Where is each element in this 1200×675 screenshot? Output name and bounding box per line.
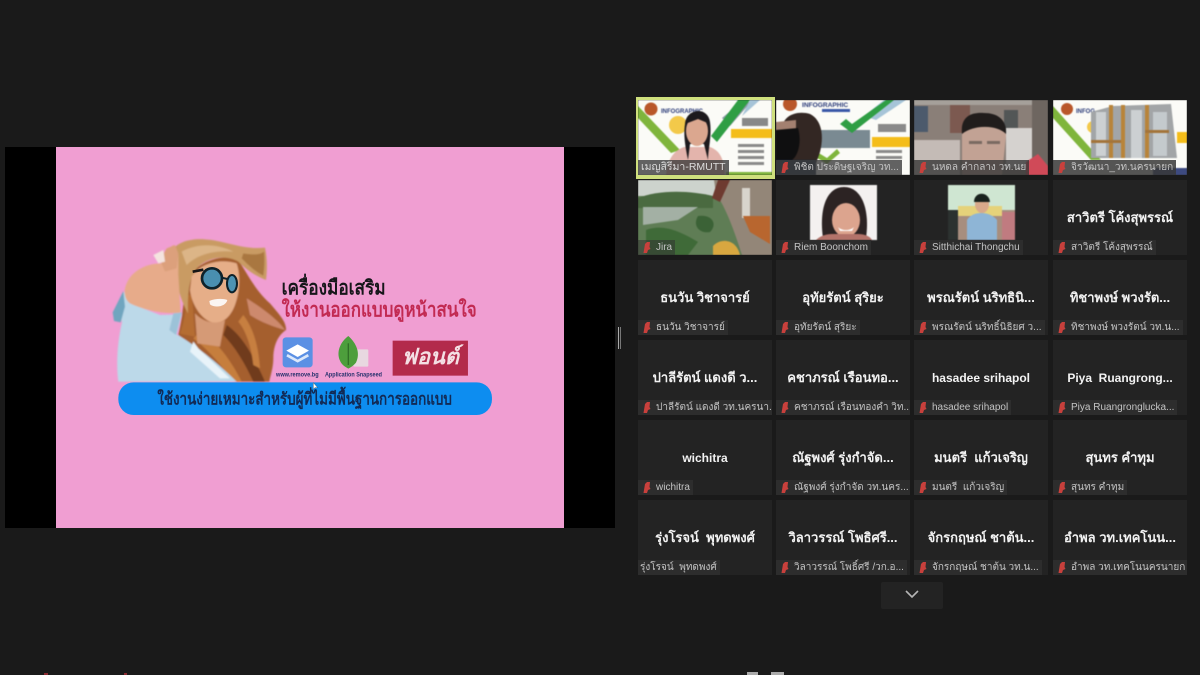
icon: remove.bg layers: www.remove.bg — [275, 372, 319, 378]
name label — [1053, 160, 1176, 175]
heading: tools: เครื่องมือเสริม — [282, 272, 386, 299]
tile: อุทัยรัตน์ สุริยะ: อุทัยรัตน์ สุริยะ — [794, 322, 857, 333]
neck — [195, 313, 225, 347]
tile: วิลาวรรณ์ โพธิศรี... — [776, 500, 910, 575]
tile: จักรกฤษณ์ ชาต้น...: จักรกฤษณ์ ชาต้น... — [928, 530, 1034, 545]
tile: Jira — [638, 180, 772, 255]
tile: wichitra: wichitra — [656, 482, 690, 493]
tile: poster with gowns: INFOG — [1076, 109, 1095, 115]
tile: ทิชาพงษ์ พวงรัต... — [1053, 260, 1187, 335]
icon: Snapseed leaf — [325, 336, 382, 378]
smile — [209, 299, 227, 306]
tile: อุทัยรัตน์ สุริยะ — [776, 260, 910, 335]
tile: อำพล วท.เทคโนน...: อำพล วท.เทคโนนครนายก — [1071, 562, 1185, 573]
tile: ปาลีรัตน์ แดงดี ว...: ปาลีรัตน์ แดงดี ว... — [653, 370, 757, 385]
tile: พรณรัตน์ นริทธินิ...: พรณรัตน์ นริทธินิ... — [927, 290, 1035, 305]
tile: สุนทร คำทุม — [1053, 420, 1187, 495]
tile: hasadee srihapol: hasadee srihapol — [932, 402, 1008, 413]
tile: participant with poster: INFOGRAPHIC — [802, 102, 848, 109]
tile: hasadee srihapol — [914, 340, 1048, 415]
tile: participant with poster — [776, 100, 910, 175]
hat — [173, 239, 267, 313]
tile: รุ่งโรจน์ พุทดพงศ์: รุ่งโรจน์ พุทดพงศ์ — [640, 562, 717, 573]
tile: hasadee srihapol: hasadee srihapol — [932, 371, 1030, 385]
tile: สุนทร คำทุม: สุนทร คำทุม — [1085, 450, 1155, 465]
tile: จักรกฤษณ์ ชาต้น... — [914, 500, 1048, 575]
tile: สุนทร คำทุม: สุนทร คำทุม — [1071, 482, 1124, 493]
tile: ธนวัน วิชาจารย์: ธนวัน วิชาจารย์ — [660, 290, 750, 305]
subheading: ให้งานออกแบบดูหน้าสนใจ — [282, 298, 477, 324]
tile: presenter — [638, 100, 772, 175]
name label: Riem Boonchom — [794, 242, 868, 253]
tile: ณัฐพงศ์ รุ่งกำจัด...: ณัฐพงศ์ รุ่งกำจัด... — [792, 450, 894, 465]
tile: วิลาวรรณ์ โพธิศรี...: วิลาวรรณ์ โพธิ์ศรี /วก.อ... — [794, 562, 904, 573]
tile: สาวิตรี โค้งสุพรรณ์ — [1053, 180, 1187, 255]
tile: พรณรัตน์ นริทธินิ...: พรณรัตน์ นริทธิ์นิธิยศ ว... — [932, 322, 1042, 333]
name label: นหดล คำกลาง วท.นย — [932, 162, 1026, 173]
tile: อุทัยรัตน์ สุริยะ: อุทัยรัตน์ สุริยะ — [802, 290, 884, 305]
tile: จักรกฤษณ์ ชาต้น...: จักรกฤษณ์ ชาต้น วท.น... — [932, 562, 1039, 573]
tile: รุ่งโรจน์ พุทดพงศ์ — [638, 500, 772, 575]
tile: ปาลีรัตน์ แดงดี ว... — [638, 340, 772, 415]
shirt — [117, 292, 237, 382]
name label: จิรวัฒนา_วท.นครนายก — [1071, 162, 1173, 173]
tile: คชาภรณ์ เรือนทอ... — [776, 340, 910, 415]
tile: Riem Boonchom — [776, 180, 910, 255]
tile: มนตรี แก้วเจริญ: มนตรี แก้วเจริญ — [932, 482, 1004, 493]
name label: พิชิต ประดิษฐเจริญ วท... — [794, 162, 899, 173]
tile: Piya Ruangrong... — [1053, 340, 1187, 415]
name label: เมญสิรีมา-RMUTT — [641, 161, 726, 173]
name label — [776, 240, 871, 255]
tile: Sitthichai Thongchu — [914, 180, 1048, 255]
tile: คชาภรณ์ เรือนทอ...: คชาภรณ์ เรือนทองคำ วิท... — [794, 402, 910, 413]
tile: wichitra — [638, 420, 772, 495]
tile: อำพล วท.เทคโนน... — [1053, 500, 1187, 575]
arm and hand — [125, 245, 181, 313]
tile: มนตรี แก้วเจริญ: มนตรี แก้วเจริญ — [934, 450, 1028, 465]
tile: man at shop — [914, 100, 1048, 175]
tile: ทิชาพงษ์ พวงรัต...: ทิชาพงษ์ พวงรัตน์ วท.น... — [1071, 322, 1180, 333]
tile: wichitra: wichitra — [682, 451, 728, 465]
tile: สาวิตรี โค้งสุพรรณ์: สาวิตรี โค้งสุพรรณ์ — [1071, 242, 1153, 253]
name label: Jira — [656, 242, 672, 253]
callout pill — [118, 382, 492, 415]
name label — [914, 160, 1029, 175]
tile: poster with gowns — [1053, 100, 1187, 175]
tile: รุ่งโรจน์ พุทดพงศ์: รุ่งโรจน์ พุทดพงศ์ — [655, 530, 755, 545]
icon: Snapseed leaf: Application Snapseed — [325, 372, 382, 378]
hair — [178, 257, 286, 382]
name label — [776, 160, 902, 175]
tile: สาวิตรี โค้งสุพรรณ์: สาวิตรี โค้งสุพรรณ์ — [1067, 210, 1173, 225]
name label — [914, 240, 1023, 255]
tile: มนตรี แก้วเจริญ — [914, 420, 1048, 495]
icon: font site logo — [393, 341, 468, 376]
tile: ณัฐพงศ์ รุ่งกำจัด...: ณัฐพงศ์ รุ่งกำจัด วท.นคร... — [794, 482, 909, 493]
sunglasses — [193, 270, 203, 272]
tile: presenter: INFOGRAPHIC — [661, 109, 704, 115]
woman in sun hat photo — [113, 239, 286, 382]
tile: Piya Ruangrong...: Piya Ruangrong... — [1067, 371, 1173, 385]
name label — [638, 240, 675, 255]
icon: font site logo: ฟอนต์ — [402, 344, 464, 369]
tile: คชาภรณ์ เรือนทอ...: คชาภรณ์ เรือนทอ... — [787, 370, 899, 385]
tile: วิลาวรรณ์ โพธิศรี...: วิลาวรรณ์ โพธิศรี... — [788, 530, 898, 545]
name label: Sitthichai Thongchu — [932, 242, 1020, 253]
tile: ธนวัน วิชาจารย์: ธนวัน วิชาจารย์ — [656, 322, 725, 333]
tile: อำพล วท.เทคโนน...: อำพล วท.เทคโนน... — [1064, 530, 1176, 545]
tile: Piya Ruangrong...: Piya Ruangronglucka... — [1071, 402, 1174, 413]
tile: พรณรัตน์ นริทธินิ... — [914, 260, 1048, 335]
callout pill: ใช้งานง่ายเหมาะสำหรับผู้ที่ไม่มีพื้นฐานการออกแบบ — [157, 386, 452, 410]
tile: ทิชาพงษ์ พวงรัต...: ทิชาพงษ์ พวงรัต... — [1070, 290, 1170, 305]
face — [190, 261, 239, 323]
icon: remove.bg layers — [275, 337, 319, 378]
tile: ณัฐพงศ์ รุ่งกำจัด... — [776, 420, 910, 495]
tile: ธนวัน วิชาจารย์ — [638, 260, 772, 335]
